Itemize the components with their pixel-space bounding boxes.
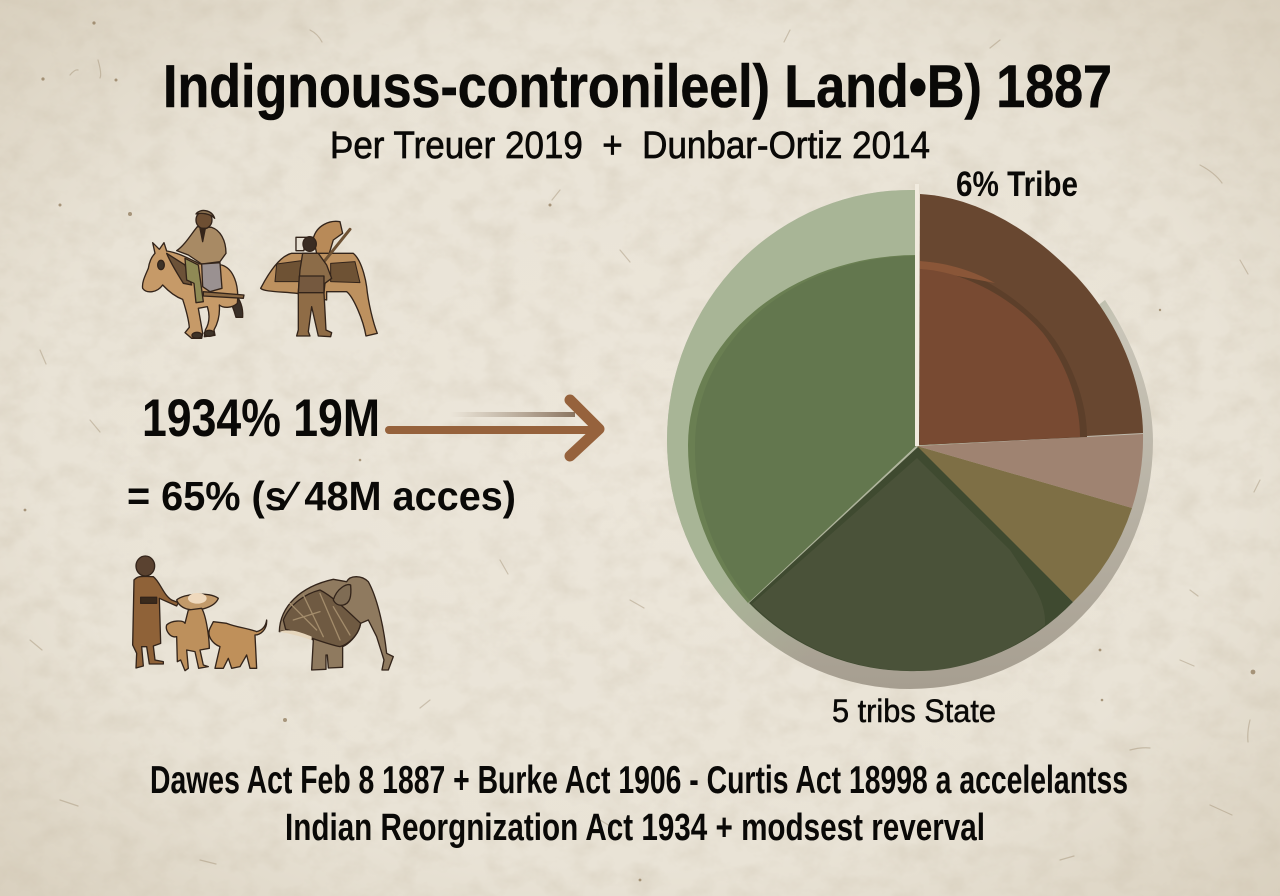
taupe slice (917, 434, 1143, 508)
pie chart: land share (667, 184, 1153, 689)
icon: woman with dogs and elephant (133, 556, 393, 671)
brown outer slice (919, 194, 1143, 445)
subtitle: sources: Þer Treuer 2019 + Dunbar-Ortiz 2014 (330, 125, 930, 167)
divider line (915, 184, 919, 446)
pie shadow (667, 190, 1153, 689)
statistic: 65% of 48M acres: = 65% (s⁄ 48M acces) (127, 473, 516, 519)
medium green slice (688, 255, 917, 603)
icon: rider on horse and figure with laden horse (142, 210, 377, 338)
light green outer slice (667, 190, 1153, 689)
dark green slice (749, 446, 1073, 671)
olive slice (917, 446, 1132, 602)
brown inner slice (920, 261, 1087, 445)
arrow: decline to pie chart (389, 400, 599, 456)
footer line 2: reorganization act: Indian Reorgnization Act 1934 + modsest reverval (285, 807, 985, 849)
pie label: tribe: 6% Tribe (956, 165, 1078, 204)
title: Indignouss-contronileel) Land•B) 1887 (163, 53, 1112, 120)
pie label: state: 5 tribs State (832, 693, 996, 729)
big figure: 1934 acres: 1934% 19M (142, 389, 380, 448)
